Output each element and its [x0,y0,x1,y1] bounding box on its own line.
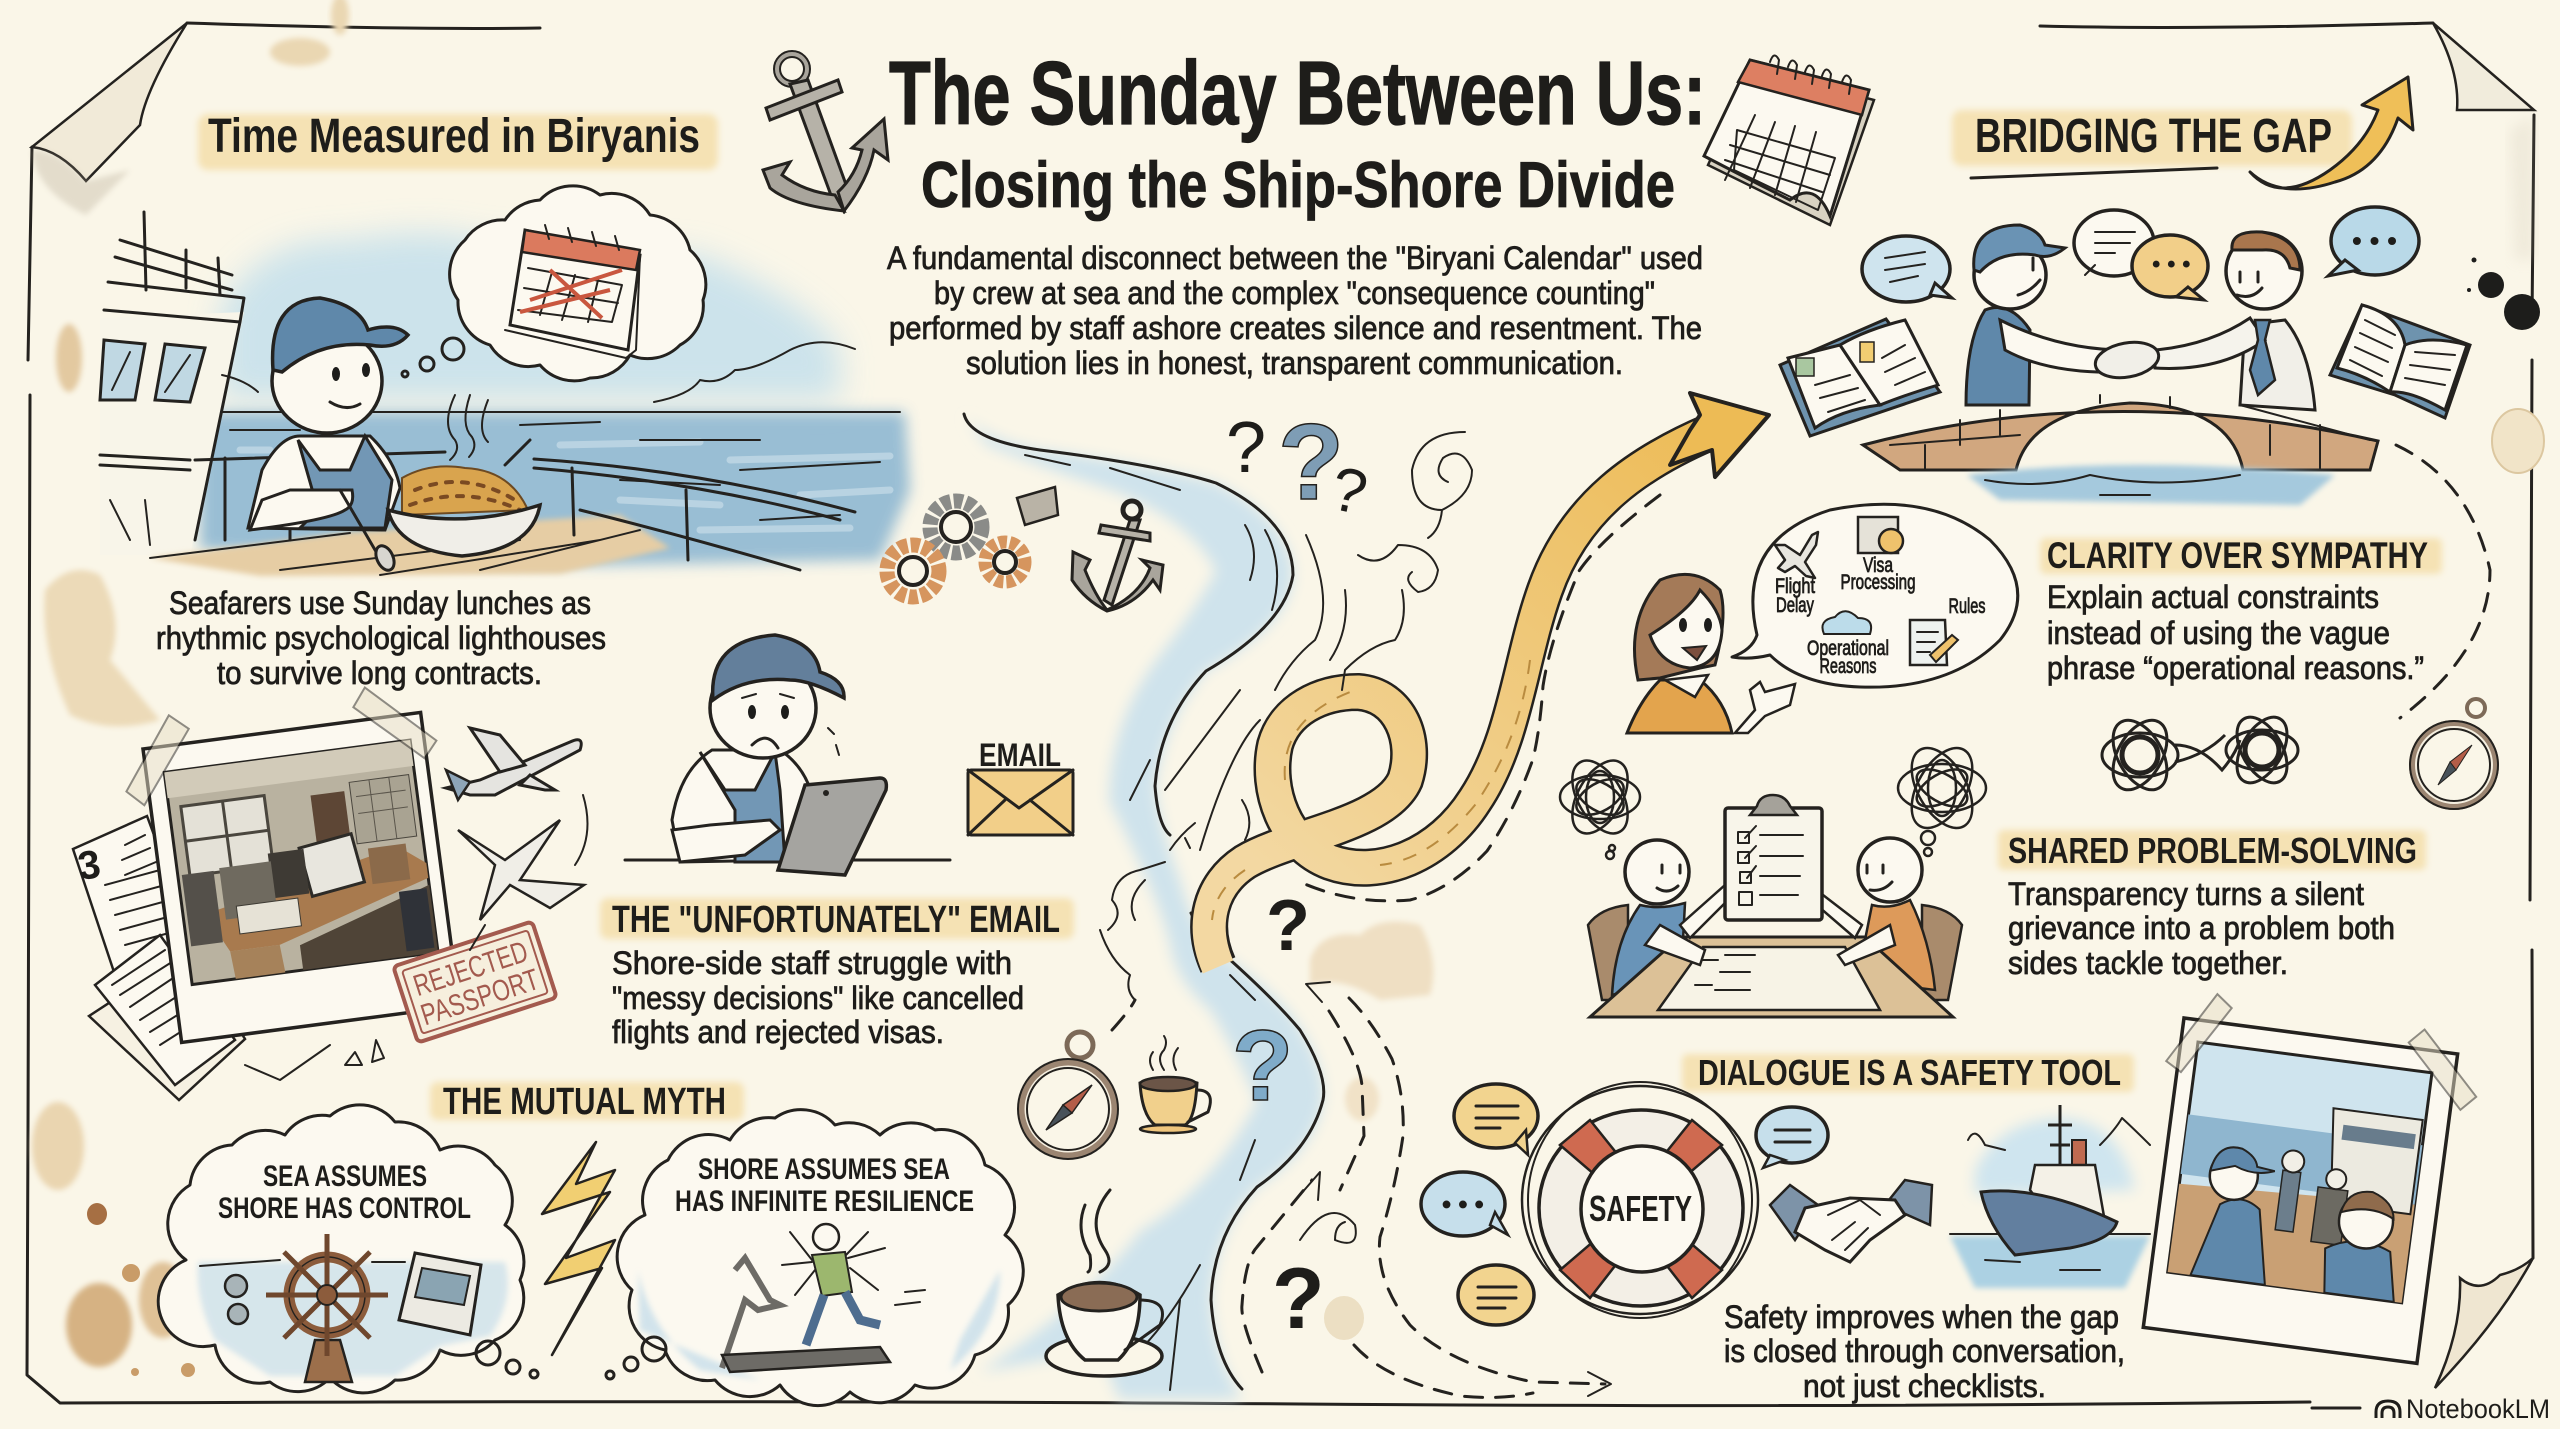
icon: title anchor [763,54,888,211]
icon: document and pencil [1910,620,1958,665]
illustration: worried seafarer with tablet [625,635,950,875]
helm wheel [266,1234,388,1382]
icon: tangled knot [2102,709,2298,799]
intro text: solution lies in honest, transparent communication. [966,345,1623,381]
icon: plane [1775,532,1818,578]
footer: NotebookLM mark [2312,1394,2550,1424]
office photo [164,740,438,985]
clipboard [1725,795,1822,920]
title [889,44,1706,221]
illustration: two people solving problem at table [1560,738,1986,1017]
icon: pocket compass [2410,699,2498,809]
heading: bridging the gap: BRIDGING THE GAP [1975,110,2332,163]
text: shore-side staff: "messy decisions" like cancelled [612,980,1024,1016]
text: clarity: phrase “operational reasons.” [2047,650,2424,686]
panel: sea assumes shore has control [158,1105,538,1393]
title: The Sunday Between Us: [889,44,1706,144]
bubble labels: Processing [1840,571,1916,594]
illustration: seafarer at Sunday lunch on deck [100,186,910,576]
speech bubbles: • • • [2352,225,2397,256]
text: transparency: sides tackle together. [2008,945,2288,981]
icon: visa calendar [1858,517,1903,553]
panel: shore assumes sea has infinite resilience: SHORE ASSUMES SEA [698,1153,950,1186]
text: shore-side staff [612,945,1024,1050]
clouds [222,342,855,402]
text: transparency: grievance into a problem both [2008,910,2395,946]
illustration: seafarer and manager on bridge [1780,207,2470,505]
chairs [1588,905,1628,1000]
table [1590,937,1953,1017]
text: Seafarers: to survive long contracts. [217,655,542,691]
text: Seafarers: rhythmic psychological lighthouses [156,620,606,656]
text: transparency [2008,876,2395,981]
title: Closing the Ship-Shore Divide [921,148,1675,221]
icons: gears and tag [887,487,1058,597]
text: clarity: Explain actual constraints [2047,579,2379,615]
biryani bowl [402,466,528,515]
bubble labels: Flight [1775,575,1815,598]
text: Seafarers: Seafarers use Sunday lunches as [169,585,591,621]
icon: mid anchor [1072,501,1163,611]
stamp: rejected passport [393,921,557,1043]
heading: bridging the gap [1952,110,2352,178]
bubble labels: Reasons [1820,655,1876,678]
seafarer [1966,308,2030,405]
panel: shore assumes sea has infinite resilience: HAS INFINITE RESILIENCE [675,1185,974,1218]
text: transparency: Transparency turns a silent [2008,876,2364,912]
question marks: ? [1325,454,1373,529]
text: safety improves: is closed through conversation, [1724,1333,2125,1369]
intro text [887,240,1703,381]
illustration: crew polaroid [2131,989,2485,1366]
manager [2240,320,2315,410]
panel: sea assumes shore has control: SEA ASSUMES [263,1160,427,1193]
handshake [2093,338,2161,382]
bubble labels: Operational [1807,637,1889,660]
illustration: papers behind polaroid: 3 [75,842,103,889]
question marks: ? [1266,886,1310,966]
open books [1780,305,2470,436]
question marks: ? [1278,401,1344,522]
text: shore-side staff: flights and rejected visas. [612,1014,944,1050]
bubble labels: Delay [1776,594,1814,617]
sea [200,412,910,565]
heading: the mutual myth: THE MUTUAL MYTH [443,1081,726,1123]
icon: title calendar [1704,55,1874,225]
icon: cloud [1822,611,1871,634]
panel: shore assumes sea has infinite resilience [606,1110,1023,1406]
icon: cancelled ghost airplane [245,795,588,1080]
icon: small coffee cup [1140,1036,1210,1133]
deck [150,515,670,576]
panel: sea assumes shore has control: SHORE HAS CONTROL [218,1192,471,1225]
intro text: performed by staff ashore creates silence and resentment. The [889,310,1702,346]
stamp: rejected passport: PASSPORT [417,963,543,1032]
question marks [1226,401,1373,1347]
stamp: rejected passport: REJECTED [410,935,532,1003]
ship cabin [100,312,244,555]
question marks: ? [1226,408,1266,488]
thought knots [1560,738,1986,859]
text: clarity [2047,579,2424,686]
bridge [1863,403,2378,470]
illustration: papers behind polaroid [73,816,245,1100]
heading: the unfortunately email: THE "UNFORTUNATELY" EMAIL [612,899,1060,941]
text: shore-side staff: Shore-side staff struggle with [612,945,1012,981]
spoon [340,490,378,555]
icon: compass [1018,1032,1118,1159]
intro text: by crew at sea and the complex "consequence counting" [934,275,1655,311]
illustration: safety lifebuoy with chat bubbles: SAFETY [1589,1188,1692,1229]
speech bubbles [1862,207,2419,302]
bubble labels: Rules [1948,595,1986,618]
heads [1625,840,1689,904]
icon: lightning bolt [542,1142,615,1355]
footer: NotebookLM mark: NotebookLM [2406,1394,2550,1424]
crew photo [2168,1042,2432,1303]
speech bubbles: • • • [2152,251,2191,278]
bubble labels: Visa [1863,554,1893,577]
chat bubbles: • • • [1442,1189,1484,1219]
dashed path around clarity block [2396,445,2490,718]
question marks: ? [1272,1251,1325,1347]
treadmill runner [722,1224,925,1372]
bubble labels [1775,554,1986,678]
icon: gap arrow [2250,77,2413,189]
illustration: safety lifebuoy with chat bubbles [1421,1082,1828,1325]
spirals and squiggles [1100,432,1472,1243]
icon: handshake [1770,1180,1932,1262]
heading: Time Measured in Biryanis: Time Measured in Biryanis [208,110,700,163]
text: safety improves [1724,1299,2125,1404]
heading: clarity over sympathy: CLARITY OVER SYMPATHY [2047,535,2428,576]
text: Seafarers [156,585,606,691]
panel: woman explaining constraints [1627,504,2018,733]
sky wash [220,232,840,400]
text: safety improves: not just checklists. [1803,1368,2046,1404]
shirts [1612,903,1685,995]
table paper [1658,947,1880,1010]
icon: email envelope [968,737,1073,835]
illustration: golden path looping to arrow [1209,393,1769,967]
question marks: ? [1232,1010,1293,1122]
text: clarity: instead of using the vague [2047,615,2390,651]
railings [195,452,855,570]
illustration: cluttered office polaroid [117,679,471,1045]
intro text: A fundamental disconnect between the "Biryani Calendar" used [887,240,1703,276]
heading: dialogue is a safety tool: DIALOGUE IS A SAFETY TOOL [1698,1052,2121,1093]
icon: large coffee cup [1046,1190,1162,1376]
arms [1645,885,1895,965]
chat bubbles [1421,1084,1828,1325]
dashed paths [1112,982,1611,1397]
text: safety improves: Safety improves when the gap [1724,1299,2119,1335]
icon: email envelope: EMAIL [979,737,1061,773]
thought cloud with crossed calendar [450,186,706,381]
speech oval [1732,504,2018,687]
seafarer [248,436,400,530]
icon: airplane [446,728,581,800]
illustration: blue river of disconnect [964,414,1346,1399]
illustration: ship at sea [1950,1105,2150,1288]
heading: shared problem-solving: SHARED PROBLEM-SOLVING [2008,830,2417,871]
